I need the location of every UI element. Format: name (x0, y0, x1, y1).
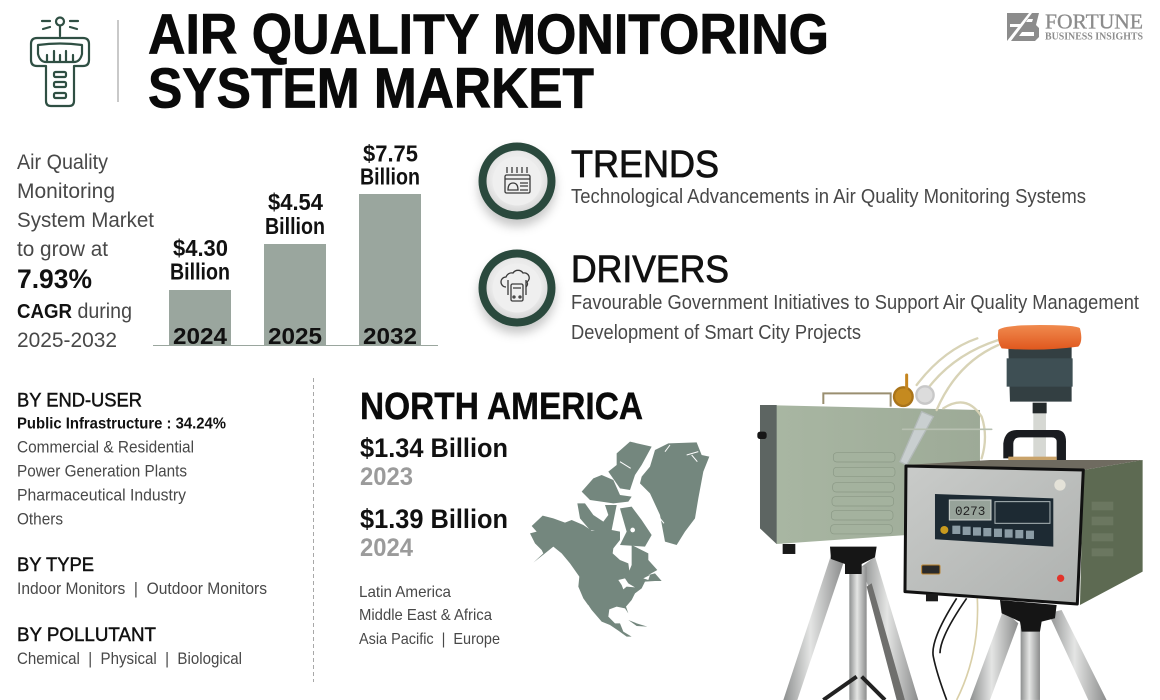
list: by type: BY TYPE (17, 555, 94, 576)
bar chart: market size: $4.54 (268, 189, 323, 215)
sampling head (998, 325, 1081, 463)
list: other regions (359, 584, 500, 648)
list: by end-user: BY END-USER (17, 390, 142, 412)
list: by end-user: Power Generation Plants (17, 462, 187, 480)
regional stats: North America: 2024 (360, 534, 413, 562)
list: other regions: Middle East & Africa (359, 607, 492, 624)
bar chart: market size: 2024 (173, 323, 227, 349)
heading and text: drivers: DRIVERS (571, 249, 729, 291)
logo: Fortune Business Insights: FORTUNE (1045, 10, 1143, 34)
regional stats: North America: NORTH AMERICA (360, 386, 643, 428)
map: North America (530, 442, 709, 637)
rear tripod (783, 547, 918, 700)
heading and text: trends (571, 144, 1086, 208)
list: by type: Indoor Monitors | Outdoor Monitors (17, 580, 267, 598)
list: other regions: Latin America (359, 584, 451, 601)
list: by end-user: Public Infrastructure : 34.24% (17, 416, 226, 432)
tubes and bottle (894, 338, 998, 465)
rear case (757, 393, 980, 554)
list: by end-user: Others (17, 510, 63, 528)
icon: trends badge (478, 142, 556, 220)
list: by end-user: Pharmaceutical Industry (17, 486, 187, 504)
regional stats: North America: 2023 (360, 463, 413, 491)
front case (905, 460, 1143, 605)
bar chart: market size: $7.75 (363, 140, 418, 166)
bar chart: market size (153, 140, 438, 349)
list: by pollutant: BY POLLUTANT (17, 625, 156, 646)
list: by end-user (17, 390, 226, 528)
text block: market growth (17, 151, 154, 352)
text block: market growth: 2025-2032 (17, 329, 117, 352)
heading and text: trends: TRENDS (571, 144, 719, 186)
bar chart: market size: Billion (170, 258, 230, 284)
bar chart: market size: Billion (360, 164, 420, 190)
text block: market growth: CAGR during (17, 300, 132, 323)
photo: air quality monitoring device (757, 325, 1143, 700)
logo: Fortune Business Insights: BUSINESS INSIGHTS (1045, 32, 1143, 42)
regional stats: North America (360, 386, 643, 562)
heading and text: drivers (571, 249, 1139, 344)
icon: drivers badge (478, 250, 556, 326)
text block: market growth: Monitoring (17, 180, 115, 203)
list: by end-user: Commercial & Residential (17, 438, 194, 456)
regional stats: North America: $1.39 Billion (360, 504, 508, 534)
bar chart: market size: Billion (265, 213, 325, 239)
list: by pollutant: Chemical | Physical | Biological (17, 650, 242, 668)
text block: market growth: to grow at (17, 238, 108, 261)
bar chart: market size: 2025 (268, 323, 322, 349)
text block: market growth: System Market (17, 209, 154, 232)
icon: air quality monitor (31, 18, 89, 106)
heading and text: trends: Technological Advancements in Air Quality Monitoring Systems (571, 186, 1086, 208)
regional stats: North America: $1.34 Billion (360, 433, 508, 463)
title (148, 2, 829, 120)
front case: 0273 (955, 504, 985, 519)
title: AIR QUALITY MONITORING (148, 2, 829, 66)
bar chart: market size: $4.30 (173, 235, 228, 261)
bar chart: market size: 2032 (363, 323, 417, 349)
list: by pollutant (17, 625, 242, 668)
logo: Fortune Business Insights (1007, 10, 1143, 42)
list: other regions: Asia Pacific | Europe (359, 631, 500, 648)
front tripod (933, 598, 1107, 700)
text block: market growth: 7.93% (17, 264, 92, 294)
list: by type (17, 555, 267, 598)
title: SYSTEM MARKET (148, 56, 594, 120)
heading and text: drivers: Development of Smart City Projects (571, 322, 861, 344)
text block: market growth: Air Quality (17, 151, 108, 174)
